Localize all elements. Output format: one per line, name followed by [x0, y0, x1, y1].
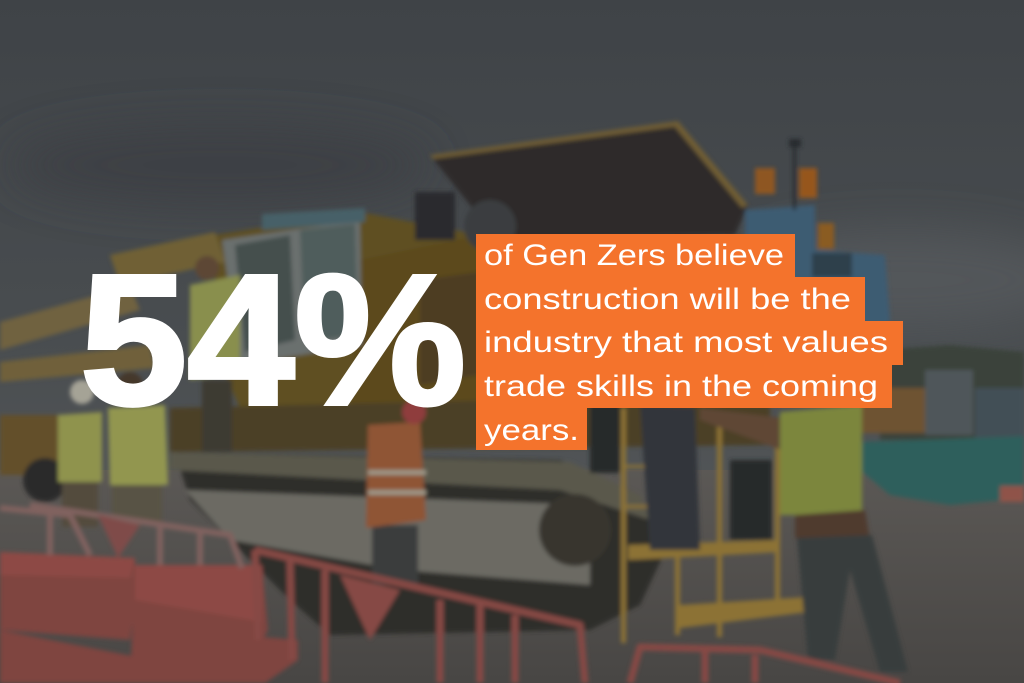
orange highlighted statement: of Gen Zers believe — [484, 239, 784, 272]
orange highlighted statement — [476, 234, 903, 450]
orange highlighted statement: years. — [484, 414, 579, 447]
orange highlighted statement: construction will be the — [484, 283, 851, 316]
orange highlighted statement: trade skills in the coming — [484, 370, 878, 403]
orange highlighted statement: industry that most values — [484, 326, 888, 359]
headline statistic: 54% — [80, 237, 466, 444]
